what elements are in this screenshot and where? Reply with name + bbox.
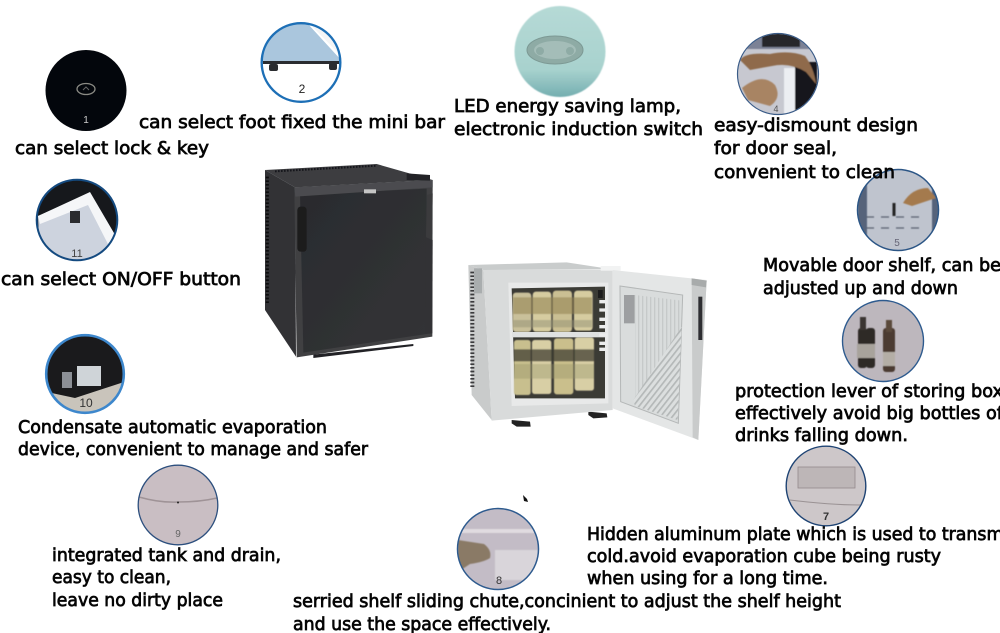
text: on/off button: can select ON/OFF button	[1, 269, 241, 290]
text: tank line 2: easy to clean,	[52, 567, 171, 588]
body front	[483, 270, 613, 421]
text: tank line 1: integrated tank and drain,	[52, 545, 281, 566]
fridge side with vents	[265, 170, 296, 357]
side panel	[468, 265, 492, 420]
hinge	[601, 266, 621, 271]
brand logo	[364, 189, 376, 193]
door liner panel	[620, 286, 683, 423]
text: door shelf line 2: adjusted up and down	[763, 278, 958, 299]
icon: evaporation device: 10	[79, 396, 93, 410]
open white mini bar fridge with cans	[468, 262, 707, 440]
feet	[313, 344, 413, 358]
callout 9: tank and drain	[138, 465, 218, 545]
diagonal stripes of door	[633, 327, 682, 420]
text: LED line 2: electronic induction switch	[454, 119, 703, 140]
text: door seal line 3: convenient to clean	[714, 162, 895, 183]
text: tank line 3: leave no dirty place	[52, 590, 223, 611]
callout 2: foot	[262, 22, 345, 102]
icon: lock: 1	[83, 115, 89, 126]
fridge door	[294, 180, 433, 357]
text: lever line 3: drinks falling down.	[735, 425, 908, 446]
icon: on/off button: 11	[71, 248, 83, 260]
icon: foot: 2	[299, 82, 306, 96]
icon: LED lamp	[514, 6, 606, 97]
callout 11: on/off button	[36, 180, 118, 262]
callout 1: lock and key	[46, 50, 126, 131]
callout 4: door seal	[738, 33, 818, 118]
text: door seal line 1: easy-dismount design	[714, 115, 918, 136]
can rows	[513, 291, 594, 395]
text: lever line 1: protection lever of storing box	[735, 381, 1000, 402]
top hinge	[407, 173, 430, 181]
callout 10: evaporation device	[46, 335, 124, 414]
callout 6: protection lever	[842, 300, 924, 382]
text: evaporation line 2: device, convenient to manage and safer	[18, 439, 369, 460]
text: LED line 1: LED energy saving lamp,	[454, 96, 681, 117]
interior	[508, 283, 608, 406]
on/off switch and shelf notches	[598, 290, 603, 298]
label	[624, 295, 635, 323]
callout 7: aluminum plate	[786, 446, 866, 526]
right side notch	[425, 237, 433, 334]
feet	[512, 420, 531, 427]
icon: door seal: 4	[773, 104, 779, 114]
door top band	[294, 180, 433, 197]
text: lock and key: can select lock & key	[15, 138, 209, 159]
text: door seal line 2: for door seal,	[714, 138, 837, 159]
small stray mark	[523, 495, 528, 502]
text: lever line 2: effectively avoid big bottles of	[735, 403, 1000, 424]
closed black mini bar fridge	[265, 164, 433, 358]
top of body	[468, 262, 613, 270]
text: can select foot: can select foot fixed the mini bar	[139, 112, 446, 133]
callout 3: LED lamp	[514, 6, 606, 97]
text: plate line 2: cold.avoid evaporation cube being rusty	[587, 546, 941, 567]
icon: tank and drain: 9	[175, 529, 181, 540]
callout 5: door shelf	[858, 170, 940, 250]
icon: door shelf: 5	[894, 238, 900, 249]
door handle	[297, 207, 307, 252]
text: evaporation line 1: Condensate automatic evaporation	[18, 417, 327, 438]
callout 8: shelf sliding chute	[458, 495, 540, 590]
fridge top	[265, 164, 433, 187]
icon: aluminum plate: 7	[823, 511, 829, 523]
shelf	[512, 332, 605, 337]
text: plate line 3: when using for a long time.	[587, 568, 828, 589]
open door	[613, 270, 707, 440]
icon: shelf chute: 8	[496, 575, 502, 587]
text: chute line 1: serried shelf sliding chute,concinient to adjust the shelf height	[293, 591, 841, 612]
icon: bottles	[842, 300, 924, 382]
text: door shelf line 1: Movable door shelf, can be	[763, 255, 1000, 276]
